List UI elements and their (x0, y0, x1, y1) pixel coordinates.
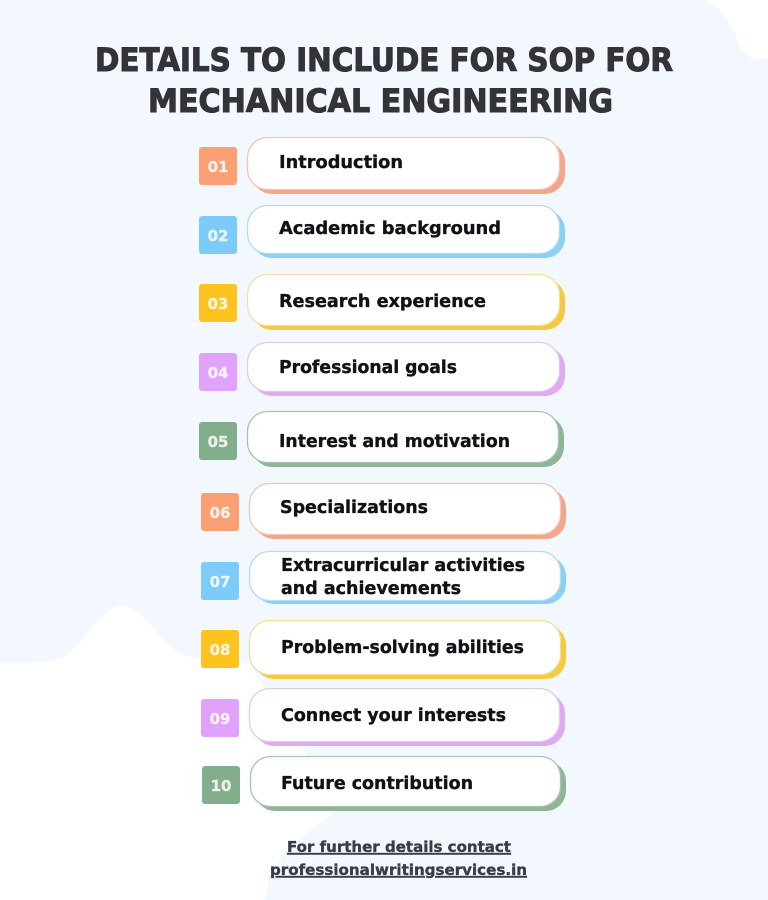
list item 01: 01 (208, 158, 228, 176)
list item 06: 06 (210, 504, 230, 522)
list item 01: Introduction (279, 153, 403, 173)
title (95, 41, 673, 120)
list item 07: Extracurricular activities (281, 556, 525, 576)
footer contact text: professionalwritingservices.in (270, 861, 527, 879)
list item 03: Research experience (279, 292, 486, 312)
list item 09 (201, 688, 565, 746)
list item 08 (201, 620, 566, 679)
list item 06 (201, 484, 566, 539)
list item 06: Specializations (280, 498, 428, 518)
list item 04: Professional goals (279, 358, 457, 378)
list item 10 (202, 756, 566, 811)
list item 05: 05 (208, 433, 228, 451)
list item 07: 07 (210, 573, 230, 591)
list item 07 (201, 552, 566, 604)
list item 02: Academic background (279, 219, 501, 239)
footer contact text (270, 838, 527, 879)
title: DETAILS TO INCLUDE FOR SOP FOR (95, 41, 673, 79)
footer contact text: For further details contact (287, 838, 512, 856)
title: MECHANICAL ENGINEERING (148, 82, 613, 120)
list item 07: and achievements (281, 579, 461, 599)
list item 10: Future contribution (281, 774, 473, 794)
list item 03 (199, 274, 565, 330)
list item 05: Interest and motivation (279, 432, 510, 452)
list item 09: 09 (210, 710, 230, 728)
list item 03: 03 (208, 295, 228, 313)
list item 08: 08 (210, 641, 230, 659)
list item 10: 10 (211, 777, 231, 795)
list item 04 (199, 342, 565, 396)
list item 05 (199, 412, 564, 467)
list item 09: Connect your interests (281, 706, 506, 726)
list item 01 (199, 138, 565, 194)
list item 02 (199, 206, 565, 258)
list item 02: 02 (208, 227, 228, 245)
list item 08: Problem-solving abilities (281, 638, 524, 658)
list item 04: 04 (208, 364, 228, 382)
